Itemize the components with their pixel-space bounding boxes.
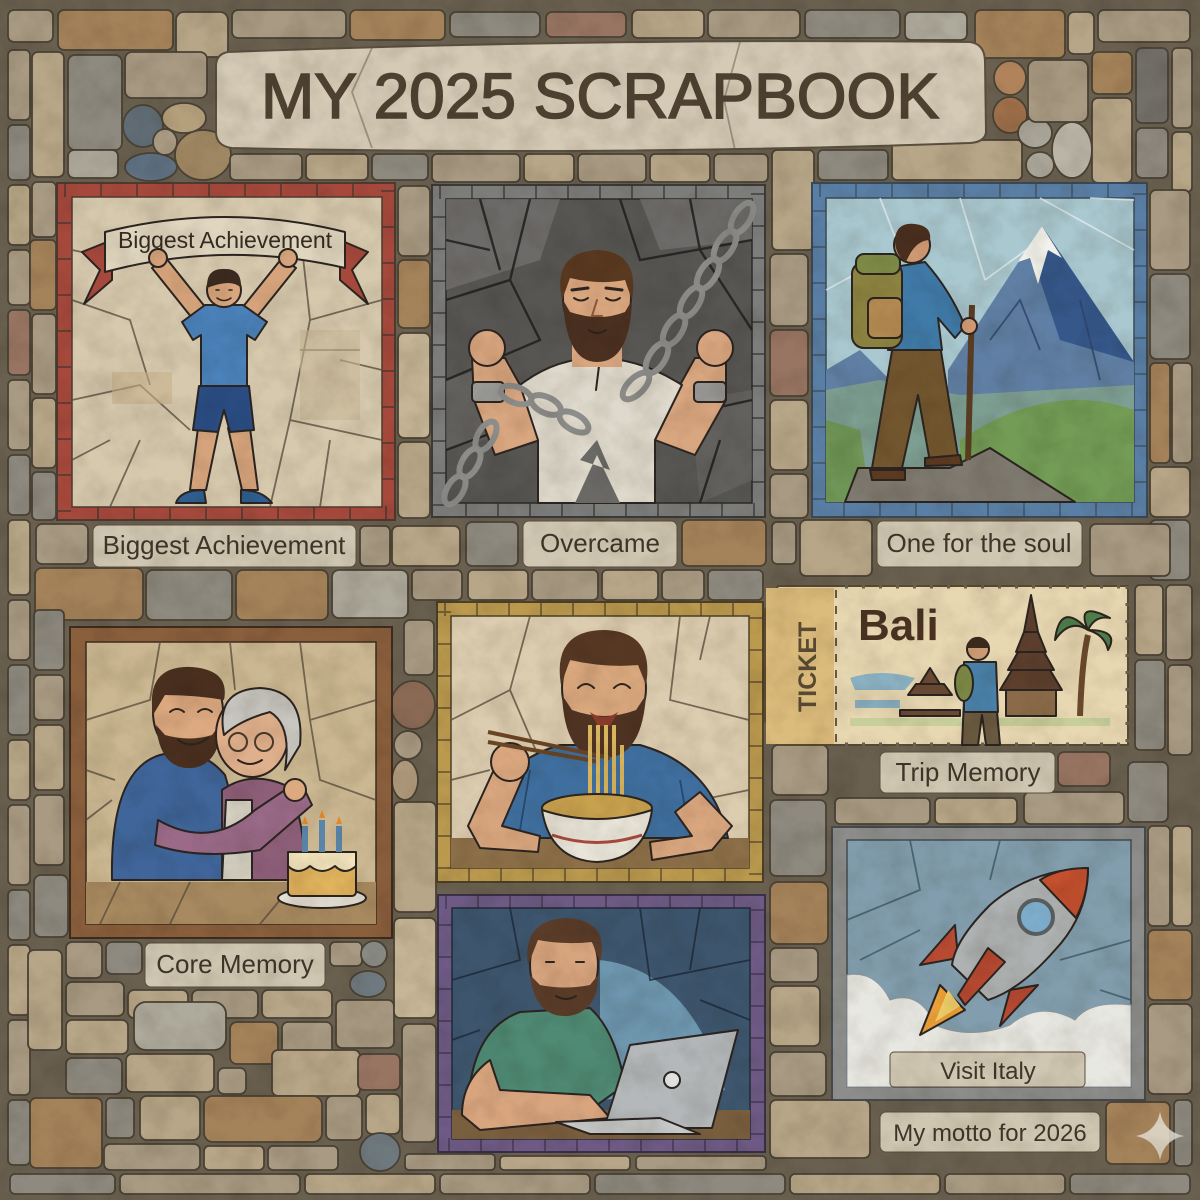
label: one for the soul: One for the soul [886, 528, 1072, 558]
panel: biggest achievement [57, 183, 395, 520]
icon: sparkle watermark [1136, 1112, 1184, 1160]
desk [452, 1110, 750, 1139]
noodles [590, 725, 622, 800]
ticket: Bali trip [765, 586, 1128, 745]
panel: one for the soul [812, 183, 1147, 517]
figure: man hugging grandmother [112, 667, 312, 880]
label: overcame [523, 521, 677, 567]
mountain [826, 226, 1134, 502]
figure: hiker [852, 224, 977, 480]
panel: core memory [70, 627, 392, 938]
ticket stub text: TICKET [794, 622, 822, 712]
panel: coding late [438, 895, 765, 1152]
icon: birthday cake [278, 810, 366, 908]
table [451, 838, 749, 868]
scene: temples and palm [850, 595, 1111, 726]
plaque: visit italy: Visit Italy [940, 1058, 1036, 1085]
figure: man eating noodles [468, 630, 732, 860]
label: trip memory: Trip Memory [896, 757, 1040, 787]
figure: man lifting banner [149, 249, 297, 503]
label: one for the soul [877, 521, 1082, 567]
destination text: Bali [858, 601, 939, 650]
label: biggest achievement [93, 525, 356, 567]
label: my motto for 2026 [880, 1112, 1100, 1152]
clouds [847, 974, 1131, 1087]
panel: visit italy rocket [832, 827, 1145, 1100]
figure: man with laptop [462, 918, 625, 1130]
label: core memory: Core Memory [156, 949, 314, 979]
title text: MY 2025 SCRAPBOOK [261, 60, 939, 132]
label: my motto for 2026: My motto for 2026 [893, 1120, 1087, 1147]
figure: traveller [955, 637, 1000, 745]
label: core memory [145, 943, 325, 987]
icon: noodle bowl [542, 794, 652, 862]
chopsticks [488, 732, 610, 762]
label: overcame: Overcame [540, 528, 660, 558]
plaque: visit italy [890, 1052, 1085, 1087]
table [86, 882, 376, 924]
rocks [845, 448, 1075, 502]
chains [440, 199, 758, 508]
figure: man breaking chains [469, 250, 733, 503]
label: biggest achievement: Biggest Achievement [103, 530, 346, 560]
panel: overcame [432, 185, 765, 517]
panel: food memory [437, 602, 763, 882]
icon: laptop [556, 1030, 738, 1134]
title plaque [216, 41, 986, 151]
banner [82, 217, 368, 304]
label: trip memory [880, 752, 1055, 793]
banner text: Biggest Achievement [118, 227, 333, 253]
icon: rocket [920, 868, 1088, 1035]
